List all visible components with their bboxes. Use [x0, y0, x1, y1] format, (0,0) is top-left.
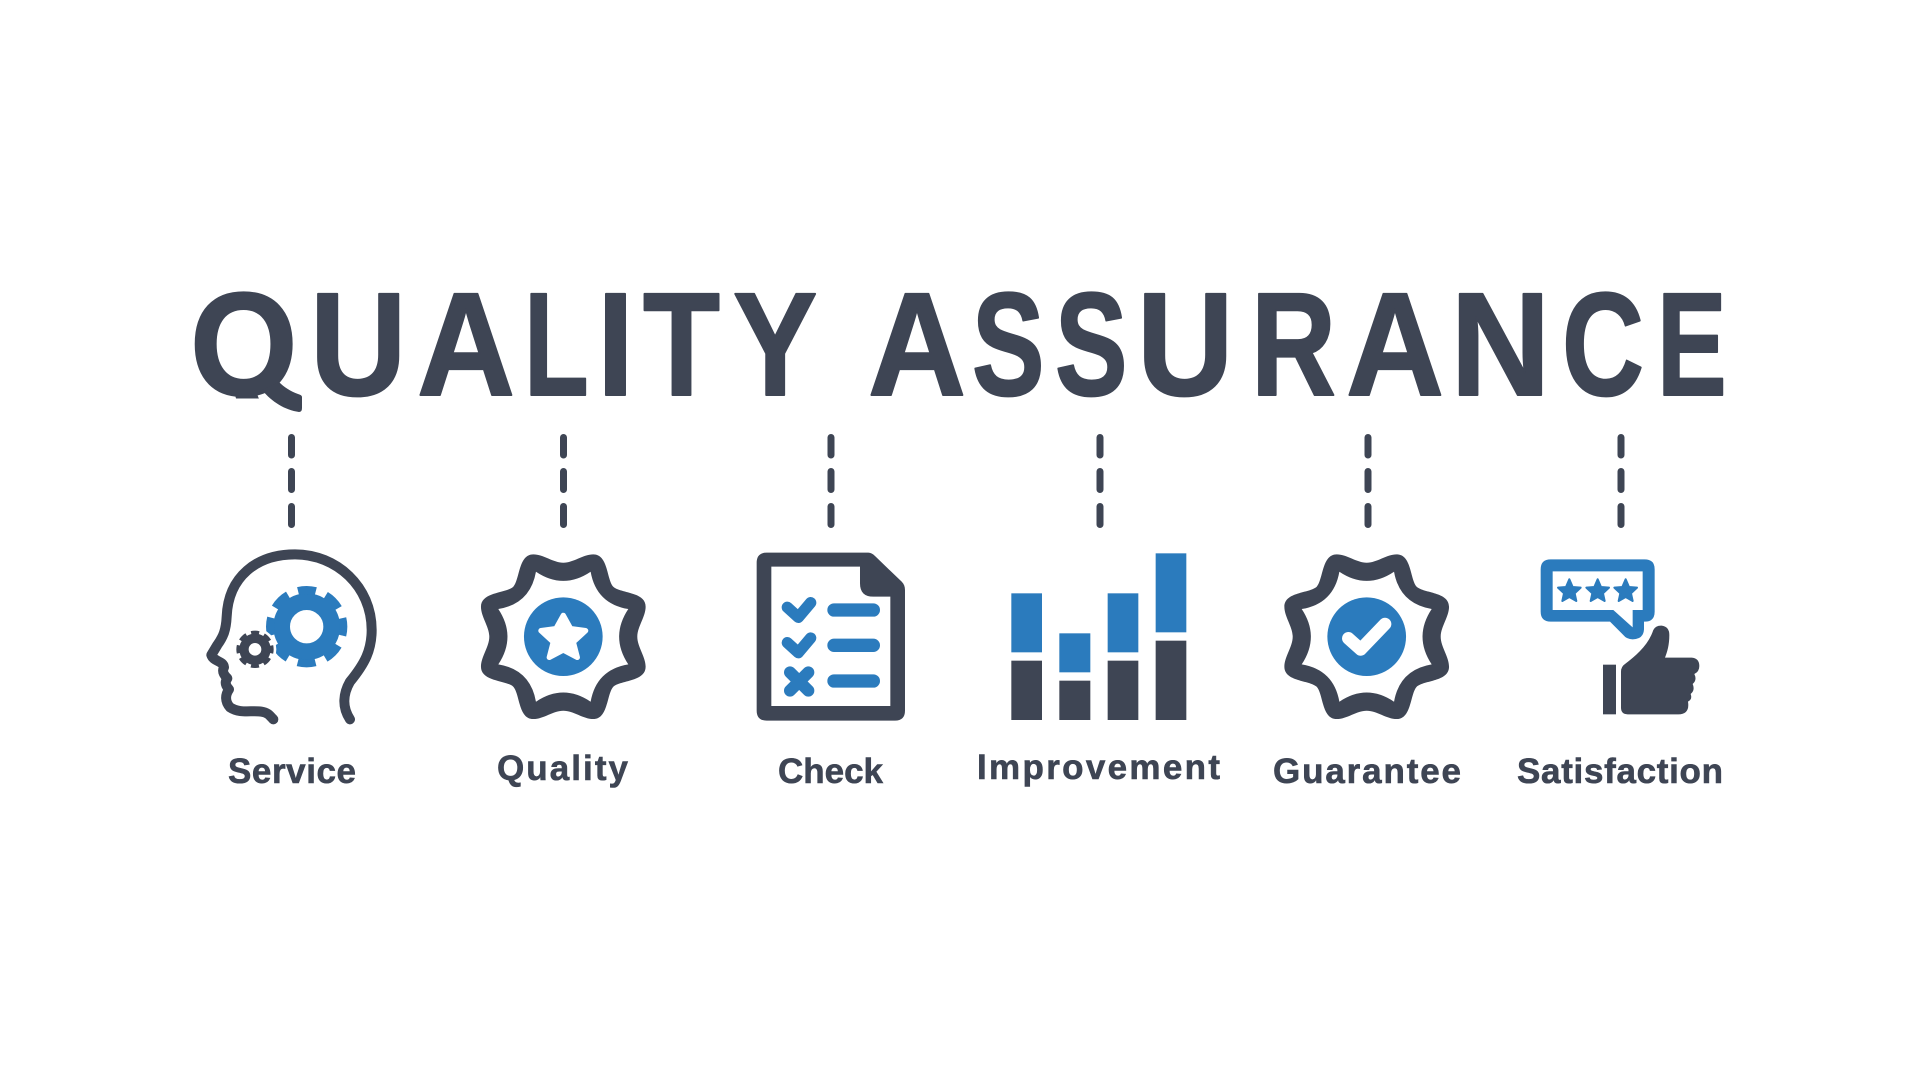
title: Y: [733, 263, 816, 427]
title Q tail: [225, 382, 305, 430]
title: E: [1657, 263, 1727, 427]
label: Improvement: Improvement: [977, 748, 1220, 787]
title: S: [972, 263, 1044, 427]
title: A: [1346, 263, 1444, 427]
title: I: [597, 263, 634, 427]
title: N: [1450, 263, 1550, 427]
icon: improvement bar chart: [1011, 553, 1186, 720]
title: L: [524, 263, 589, 427]
title: R: [1251, 263, 1336, 427]
label: Service: Service: [228, 752, 356, 791]
title: U: [310, 263, 406, 427]
label: Satisfaction: Satisfaction: [1517, 752, 1723, 791]
title: S: [1055, 263, 1128, 427]
label: Quality: Quality: [497, 749, 629, 788]
dashed connectors: [292, 438, 1621, 524]
title: T: [643, 263, 720, 427]
label: Guarantee: Guarantee: [1273, 752, 1461, 791]
title: A: [868, 263, 966, 427]
title: C: [1562, 263, 1644, 427]
title: A: [417, 263, 515, 427]
title: Q: [190, 263, 298, 427]
icon: guarantee badge with check: [1284, 554, 1449, 719]
icon: service head with gears: [211, 554, 372, 719]
icon: quality badge with star: [481, 554, 646, 719]
title: U: [1137, 263, 1234, 427]
label: Check: Check: [778, 752, 884, 791]
icon: satisfaction bubble and thumbs up: [1541, 559, 1699, 714]
icon: checklist document: [757, 553, 905, 721]
